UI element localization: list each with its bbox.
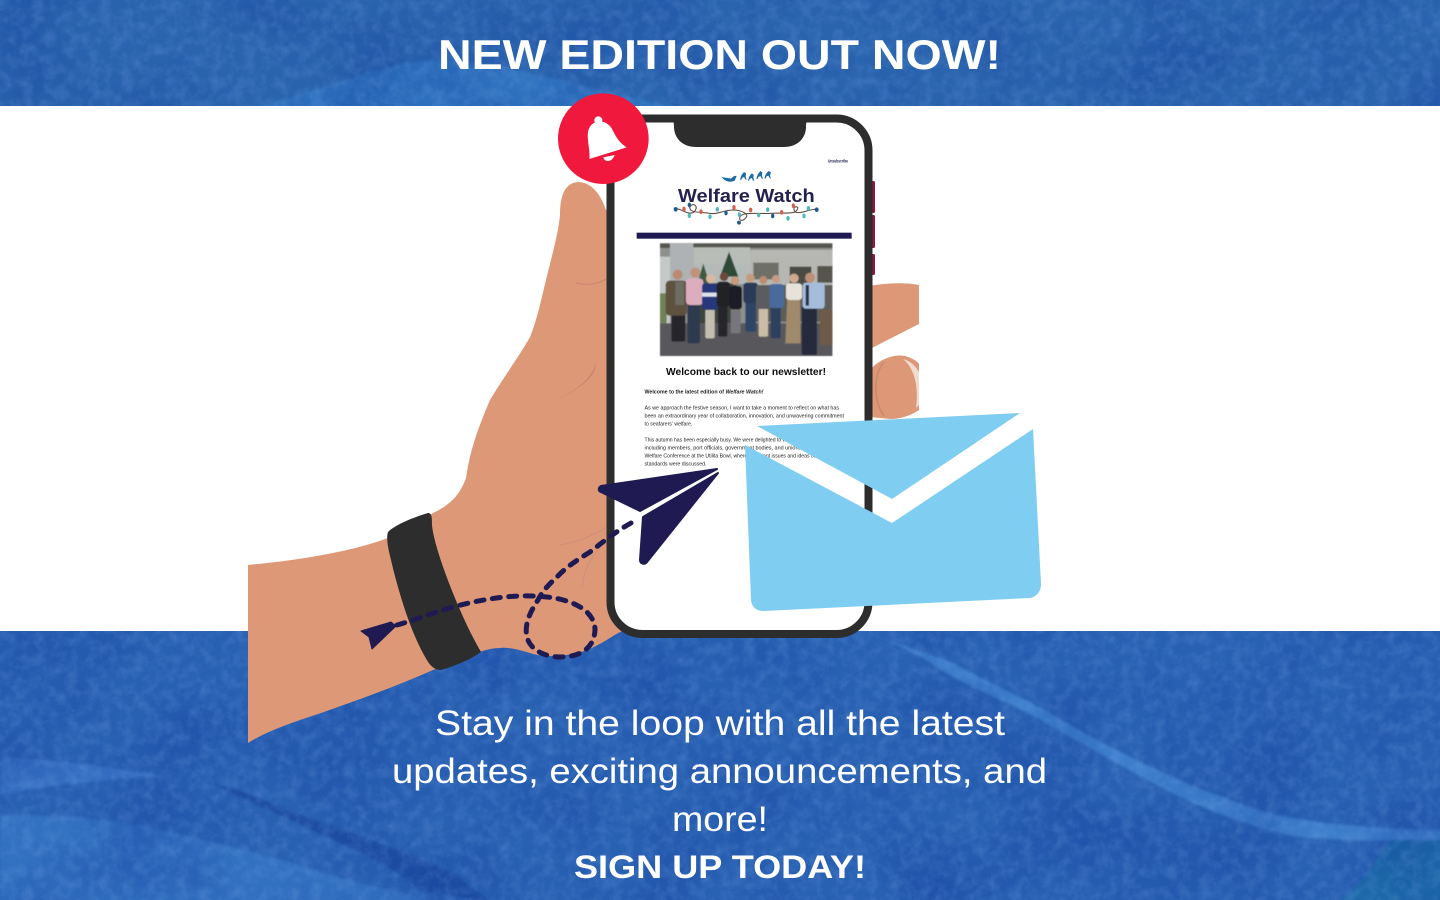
icon: dashed flight path	[397, 523, 631, 657]
phone notch	[672, 120, 808, 147]
phone body	[610, 118, 868, 634]
newsletter: article text	[644, 366, 845, 468]
title: NEW EDITION OUT NOW!	[438, 31, 1001, 78]
masthead: Welfare Watch	[678, 186, 815, 206]
call to action: SIGN UP TODAY!	[574, 849, 866, 885]
group photograph	[660, 243, 832, 356]
icon: paper plane	[599, 469, 718, 564]
header divider	[637, 233, 852, 239]
newsletter heading: Welcome back to our newsletter!	[666, 366, 826, 378]
string of lights	[674, 203, 819, 225]
newsletter: header and photo	[558, 93, 852, 357]
icon: notification bell	[558, 93, 649, 184]
body text: updates, exciting announcements, and	[392, 752, 1047, 791]
illustration: wristband	[387, 513, 481, 670]
body text: Stay in the loop with all the latest	[435, 704, 1005, 743]
body text	[392, 704, 1047, 839]
newsletter paragraph two	[644, 438, 835, 468]
newsletter paragraph two: standards were discussed.	[644, 462, 706, 468]
newsletter intro: Welcome to the latest edition of Welfare Watch!	[644, 390, 764, 396]
newsletter paragraph two: Welfare Conference at the Utilita Bowl, where important issues and ideas on welfare	[644, 454, 835, 460]
newsletter paragraph one: As we approach the festive season, I want to take a moment to reflect on what has	[644, 406, 839, 412]
people	[666, 268, 825, 355]
newsletter paragraph one: been an extraordinary year of collaboration, innovation, and unwavering commitment	[644, 414, 845, 420]
body text: more!	[672, 800, 768, 839]
icon: arrow tail of flight path	[361, 622, 396, 649]
sleigh and reindeer	[721, 171, 771, 182]
newsletter paragraph one	[644, 406, 845, 428]
phone side buttons	[871, 181, 875, 275]
illustration: fingers behind phone	[870, 283, 919, 419]
icon: envelope	[745, 413, 1041, 611]
illustration: hand	[248, 182, 625, 743]
newsletter paragraph two: including members, port officials, government bodies, and unions to our annual	[644, 446, 834, 452]
newsletter paragraph two: This autumn has been especially busy. We were delighted to welcome many guests,	[644, 438, 834, 444]
newsletter paragraph one: to seafarers' welfare.	[644, 422, 692, 428]
